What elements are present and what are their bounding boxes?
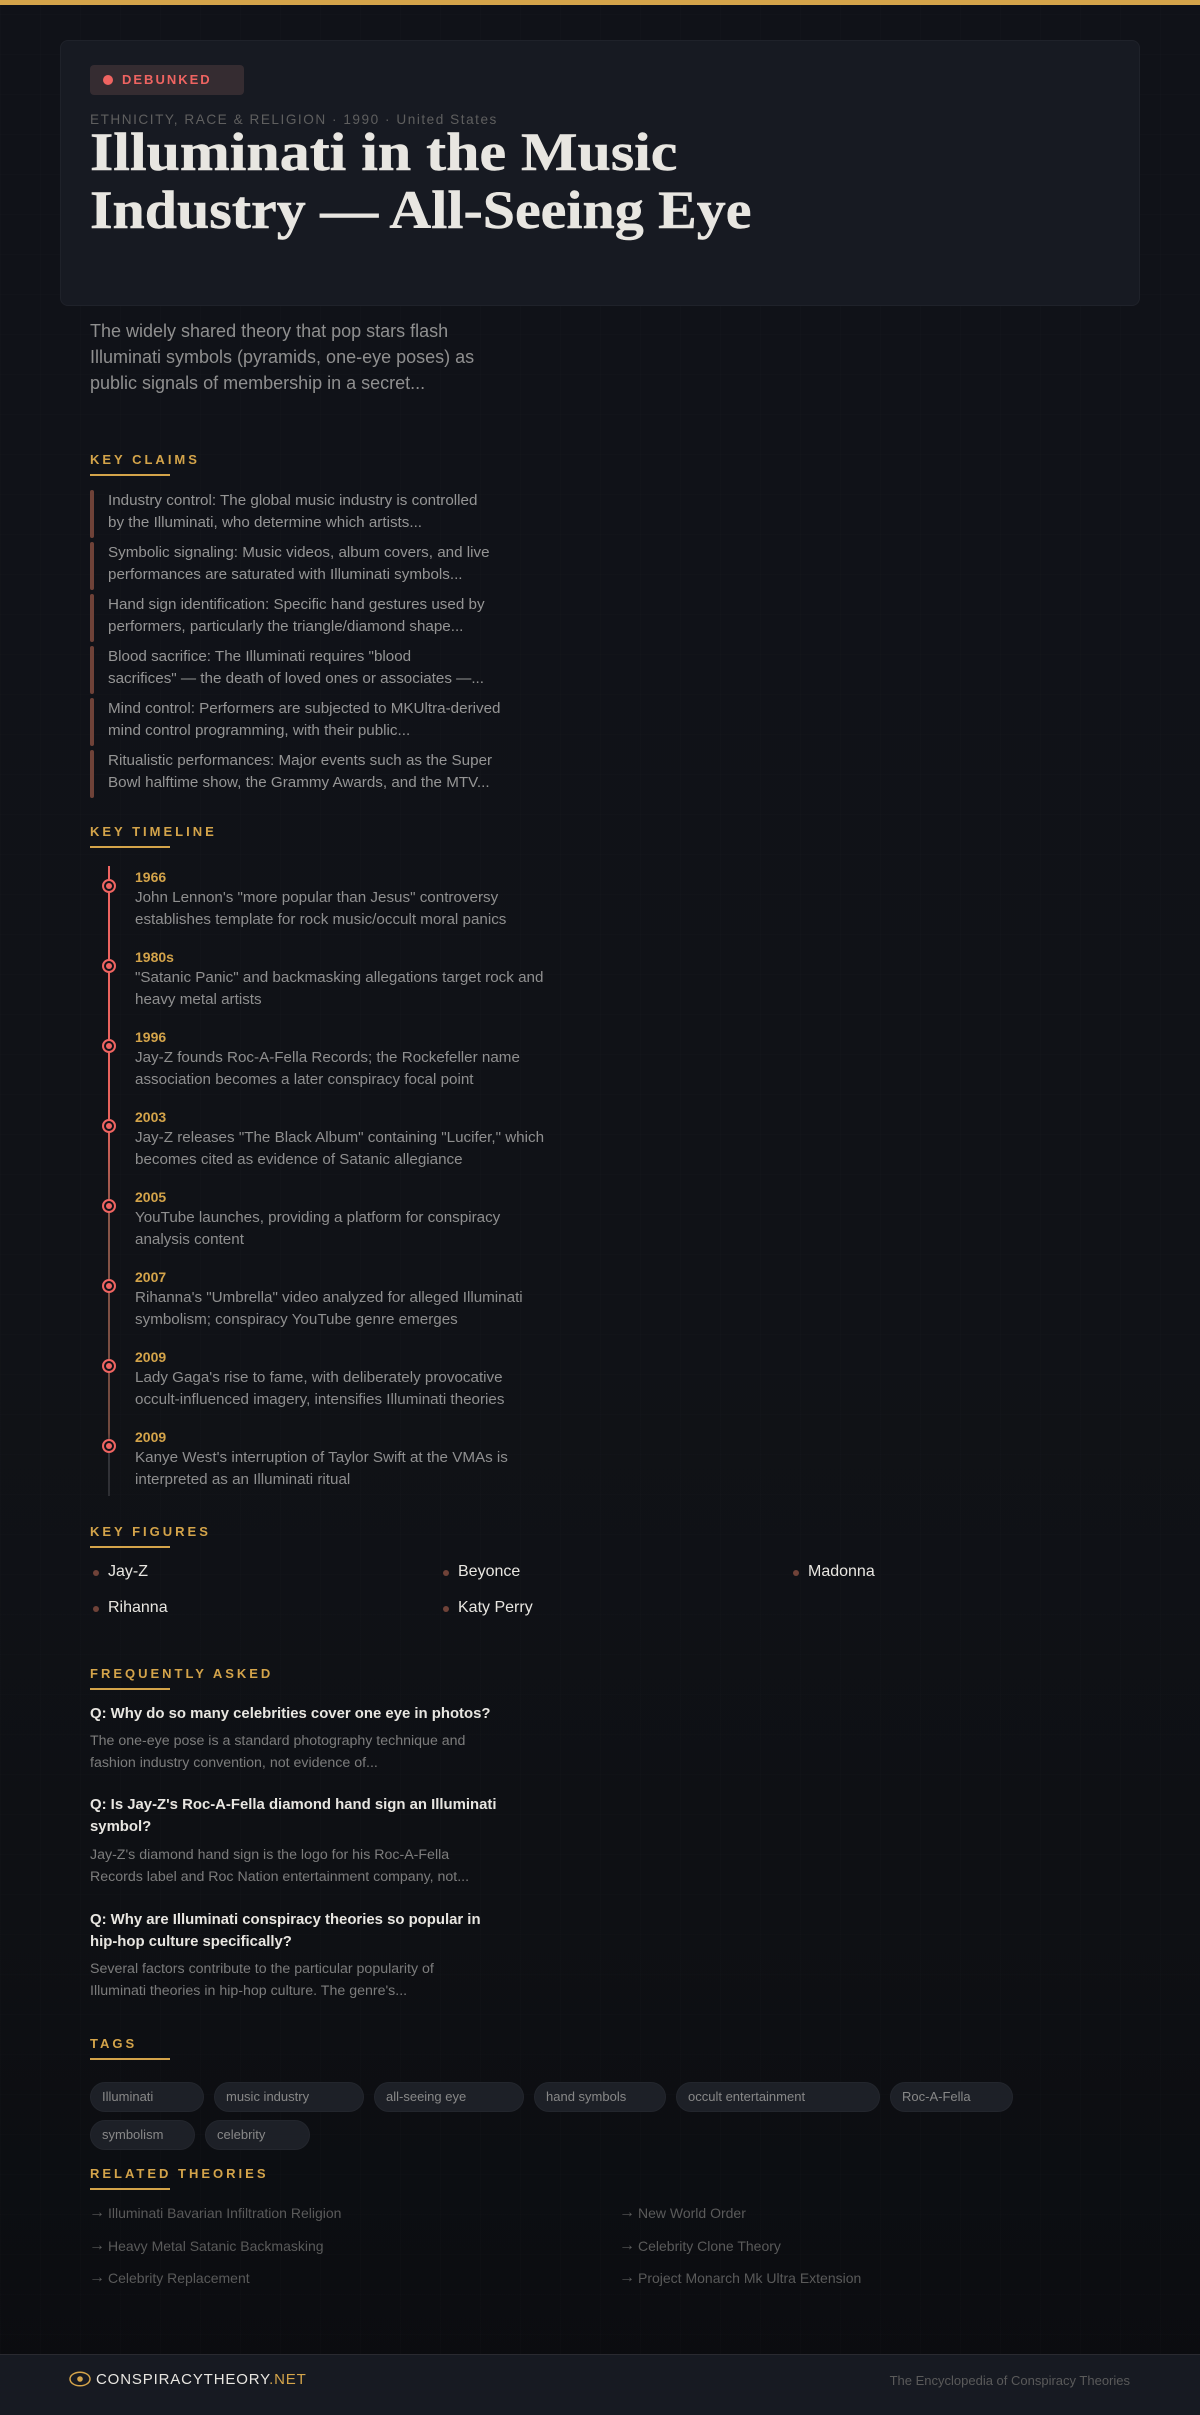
answer 3: Several factors contribute to the particular popularity of xyxy=(90,1961,434,1977)
tag: symbolism xyxy=(90,2120,195,2150)
related: Heavy Metal Satanic Backmasking: → xyxy=(89,2237,105,2254)
tag: music industry xyxy=(214,2082,364,2112)
related: Illuminati Bavarian Infiltration Religion: Illuminati Bavarian Infiltration Religion xyxy=(108,2205,341,2221)
question 3 xyxy=(90,1912,481,1950)
event 1966: establishes template for rock music/occult moral panics xyxy=(135,911,506,928)
event 2009 Kanye West: interpreted as an Illuminati ritual xyxy=(135,1471,350,1488)
related: Celebrity Clone Theory: Celebrity Clone Theory xyxy=(638,2238,781,2254)
heading: tags: TAGS xyxy=(90,2036,137,2051)
answer 1 xyxy=(90,1733,465,1771)
tag: celebrity xyxy=(205,2120,310,2150)
figure: Katy Perry: Katy Perry xyxy=(458,1599,533,1616)
claim 2 xyxy=(90,542,490,590)
top accent bar xyxy=(0,0,1200,5)
question 1: Q: Why do so many celebrities cover one eye in photos? xyxy=(90,1706,490,1722)
badge label: DEBUNKED xyxy=(122,72,212,87)
tag: Illuminati xyxy=(90,2082,204,2112)
category and date meta line: ETHNICITY, RACE & RELIGION · 1990 · United States xyxy=(90,112,498,127)
claim 4: sacrifices" — the death of loved ones or associates —... xyxy=(108,670,484,687)
event 1996: 1996 xyxy=(135,1029,166,1045)
tag: occult entertainment: occult entertainment xyxy=(688,2089,805,2104)
event 1980s xyxy=(102,949,543,1008)
lead summary: Illuminati symbols (pyramids, one-eye poses) as xyxy=(90,347,474,367)
event 2003: 2003 xyxy=(135,1109,166,1125)
related theories list xyxy=(89,2204,861,2286)
event 2009 Kanye West: 2009 xyxy=(135,1429,166,1445)
related: Celebrity Replacement: → xyxy=(89,2269,105,2286)
timeline xyxy=(102,866,544,1496)
claim 2: performances are saturated with Illuminati symbols... xyxy=(108,566,463,583)
heading: frequently asked: FREQUENTLY ASKED xyxy=(90,1666,273,1681)
event 2003: Jay-Z releases "The Black Album" containing "Lucifer," which xyxy=(135,1129,544,1146)
claim 3: performers, particularly the triangle/diamond shape... xyxy=(108,618,463,635)
related: Project Monarch Mk Ultra Extension: → xyxy=(619,2269,635,2286)
figure: Jay-Z: Jay-Z xyxy=(108,1563,148,1580)
related: Celebrity Clone Theory xyxy=(620,2235,781,2257)
question 3: hip-hop culture specifically? xyxy=(90,1934,292,1950)
lead summary: The widely shared theory that pop stars flash xyxy=(90,321,448,341)
tag: Roc-A-Fella: Roc-A-Fella xyxy=(902,2089,971,2104)
footer xyxy=(0,2354,1200,2415)
lead summary: public signals of membership in a secret... xyxy=(90,373,425,393)
answer 2: Records label and Roc Nation entertainment company, not... xyxy=(90,1869,469,1885)
question 2: Q: Is Jay-Z's Roc-A-Fella diamond hand sign an Illuminati xyxy=(90,1797,496,1813)
answer 3 xyxy=(90,1961,434,1999)
event 1966: John Lennon's "more popular than Jesus" controversy xyxy=(135,889,498,906)
tag: symbolism: symbolism xyxy=(102,2127,163,2142)
event 1996 xyxy=(102,1029,520,1088)
event 1980s: heavy metal artists xyxy=(135,991,262,1008)
timeline spine xyxy=(108,866,110,1496)
question 3: Q: Why are Illuminati conspiracy theories so popular in xyxy=(90,1912,481,1928)
tag: Illuminati: Illuminati xyxy=(102,2089,153,2104)
title: Illuminati in the Music xyxy=(90,121,677,182)
panel: key figures xyxy=(93,1563,875,1616)
claim 3: Hand sign identification: Specific hand gestures used by xyxy=(108,596,485,613)
event 2007: Rihanna's "Umbrella" video analyzed for alleged Illuminati xyxy=(135,1289,523,1306)
question 2: symbol? xyxy=(90,1819,151,1835)
related: Project Monarch Mk Ultra Extension xyxy=(620,2267,861,2289)
related: Project Monarch Mk Ultra Extension: Project Monarch Mk Ultra Extension xyxy=(638,2270,861,2286)
status badge: debunked xyxy=(90,65,244,95)
answer 1: The one-eye pose is a standard photography technique and xyxy=(90,1733,465,1749)
question 2 xyxy=(90,1797,496,1835)
tag: hand symbols xyxy=(534,2082,666,2112)
heading: key claims: KEY CLAIMS xyxy=(90,452,200,467)
tag: Roc-A-Fella xyxy=(890,2082,1013,2112)
related: Celebrity Replacement: Celebrity Replacement xyxy=(108,2270,250,2286)
event 1996: Jay-Z founds Roc-A-Fella Records; the Rockefeller name xyxy=(135,1049,520,1066)
answer 3: Illuminati theories in hip-hop culture. The genre's... xyxy=(90,1983,407,1999)
related: Celebrity Replacement xyxy=(90,2267,250,2289)
heading: key figures: KEY FIGURES xyxy=(90,1524,211,1539)
answer 2 xyxy=(90,1847,469,1885)
tag: music industry: music industry xyxy=(226,2089,309,2104)
event 1980s: 1980s xyxy=(135,949,174,965)
event 2005: YouTube launches, providing a platform for conspiracy xyxy=(135,1209,500,1226)
answer 1: fashion industry convention, not evidence of... xyxy=(90,1755,378,1771)
related: Illuminati Bavarian Infiltration Religion: → xyxy=(89,2204,105,2221)
heading: key timeline: KEY TIMELINE xyxy=(90,824,217,839)
claim 4: Blood sacrifice: The Illuminati requires "blood xyxy=(108,648,411,665)
panel: key claims xyxy=(90,490,500,798)
event 1996: association becomes a later conspiracy focal point xyxy=(135,1071,474,1088)
claim 5: mind control programming, with their public... xyxy=(108,722,410,739)
figure: Madonna: Madonna xyxy=(808,1563,875,1580)
event 1966: 1966 xyxy=(135,869,166,885)
logo wordmark: CONSPIRACYTHEORY.NET xyxy=(96,2371,307,2388)
answer 2: Jay-Z's diamond hand sign is the logo for his Roc-A-Fella xyxy=(90,1847,449,1863)
heading: related theories: RELATED THEORIES xyxy=(90,2166,268,2181)
claim 1: by the Illuminati, who determine which artists... xyxy=(108,514,422,531)
tag: occult entertainment xyxy=(676,2082,880,2112)
badge dot xyxy=(103,75,113,85)
event 2009 Kanye West xyxy=(102,1429,508,1488)
event 2009 Lady Gaga: occult-influenced imagery, intensifies Illuminati theories xyxy=(135,1391,504,1408)
event 2003: becomes cited as evidence of Satanic allegiance xyxy=(135,1151,463,1168)
related: New World Order: New World Order xyxy=(638,2205,746,2221)
claim 3 xyxy=(90,594,485,642)
event 2009 Lady Gaga xyxy=(102,1349,504,1408)
event 2007 xyxy=(102,1269,523,1328)
icon: eye logo xyxy=(69,2371,91,2387)
panel: hero header xyxy=(60,40,1140,306)
event 1966 xyxy=(102,869,506,928)
event 2007: symbolism; conspiracy YouTube genre emerges xyxy=(135,1311,458,1328)
figure: Rihanna: Rihanna xyxy=(108,1599,168,1616)
claim 5: Mind control: Performers are subjected to MKUltra-derived xyxy=(108,700,500,717)
tag list xyxy=(90,2082,1013,2150)
tag: all-seeing eye: all-seeing eye xyxy=(386,2089,466,2104)
footer tagline: The Encyclopedia of Conspiracy Theories xyxy=(890,2373,1130,2388)
related: New World Order: → xyxy=(619,2204,635,2221)
event 2003 xyxy=(102,1109,544,1168)
event 2005: 2005 xyxy=(135,1189,166,1205)
claim 1 xyxy=(90,490,477,538)
tag: all-seeing eye xyxy=(374,2082,524,2112)
tag: hand symbols: hand symbols xyxy=(546,2089,626,2104)
related: Celebrity Clone Theory: → xyxy=(619,2237,635,2254)
lead summary xyxy=(90,321,474,393)
title xyxy=(90,121,751,240)
event 2009 Lady Gaga: 2009 xyxy=(135,1349,166,1365)
claim 4 xyxy=(90,646,484,694)
claim 6: Bowl halftime show, the Grammy Awards, and the MTV... xyxy=(108,774,490,791)
figure: Beyonce: Beyonce xyxy=(458,1563,520,1580)
claim 5 xyxy=(90,698,500,746)
event 2005: analysis content xyxy=(135,1231,244,1248)
claim 6 xyxy=(90,750,492,798)
event 2009 Lady Gaga: Lady Gaga's rise to fame, with deliberately provocative xyxy=(135,1369,503,1386)
claim 2: Symbolic signaling: Music videos, album covers, and live xyxy=(108,544,490,561)
claim 6: Ritualistic performances: Major events such as the Super xyxy=(108,752,492,769)
related: Heavy Metal Satanic Backmasking: Heavy Metal Satanic Backmasking xyxy=(108,2238,324,2254)
event 1980s: "Satanic Panic" and backmasking allegations target rock and xyxy=(135,969,543,986)
event 2005 xyxy=(102,1189,500,1248)
title: Industry — All-Seeing Eye xyxy=(90,179,751,240)
event 2009 Kanye West: Kanye West's interruption of Taylor Swift at the VMAs is xyxy=(135,1449,508,1466)
tag: celebrity: celebrity xyxy=(217,2127,265,2142)
event 2007: 2007 xyxy=(135,1269,166,1285)
claim 1: Industry control: The global music industry is controlled xyxy=(108,492,477,509)
